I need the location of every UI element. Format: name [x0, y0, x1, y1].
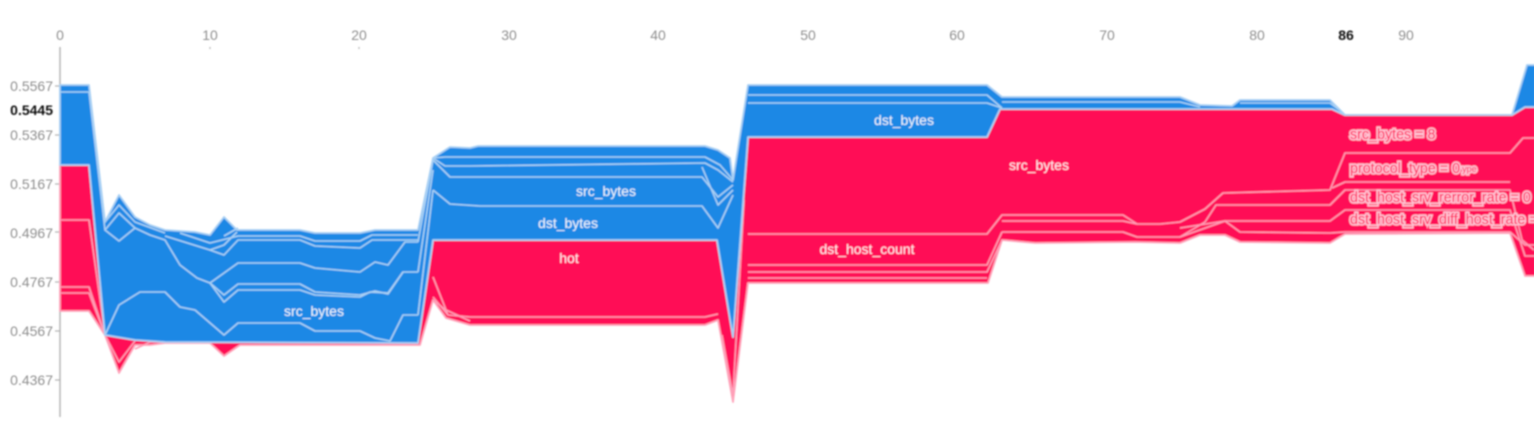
y axis: 0.5445: [10, 102, 53, 118]
label: src_bytes middle: src_bytes: [576, 183, 636, 199]
y axis: 0.4967: [10, 225, 53, 241]
x axis: 30: [501, 27, 517, 43]
x axis: 86: [1338, 27, 1354, 43]
label: src_bytes right: src_bytes: [1009, 157, 1069, 173]
x axis: 70: [1099, 27, 1115, 43]
y axis: 0.5567: [10, 78, 53, 94]
x axis: 40: [650, 27, 666, 43]
label: dst_host_count: dst_host_count: [820, 241, 915, 257]
x axis: 60: [949, 27, 965, 43]
x axis: 50: [800, 27, 816, 43]
outlined label: dst_host_srv_rerror_rate = 0: dst_host_srv_rerror_rate = 0: [1350, 190, 1531, 206]
y axis: 0.4767: [10, 274, 53, 290]
red force separators: [60, 138, 1536, 395]
x axis: 20: [351, 27, 367, 43]
outlined label: src_bytes = 8: src_bytes = 8: [1350, 127, 1435, 143]
label: src_bytes negative: src_bytes: [284, 303, 344, 319]
x axis: 0: [56, 27, 64, 43]
label: dst_bytes middle: dst_bytes: [538, 215, 598, 231]
x axis: 90: [1398, 27, 1414, 43]
blue force separators: [60, 92, 1342, 341]
outlined label: protocol_type = 0: ype: [1462, 164, 1477, 174]
x axis: 10: [202, 27, 218, 43]
y axis: 0.4367: [10, 372, 53, 388]
y axis: [10, 47, 359, 417]
x axis: [56, 30, 1414, 41]
label: dst_bytes right: dst_bytes: [874, 112, 934, 128]
blue force area: [60, 65, 1536, 343]
label: hot: hot: [559, 250, 579, 266]
x axis: 80: [1249, 27, 1265, 43]
y axis: 0.5367: [10, 127, 53, 143]
y axis: 0.5167: [10, 176, 53, 192]
outlined label: protocol_type = 0: protocol_type = 0: [1350, 161, 1460, 177]
y axis: 0.4567: [10, 323, 53, 339]
red force area: [60, 107, 1536, 402]
